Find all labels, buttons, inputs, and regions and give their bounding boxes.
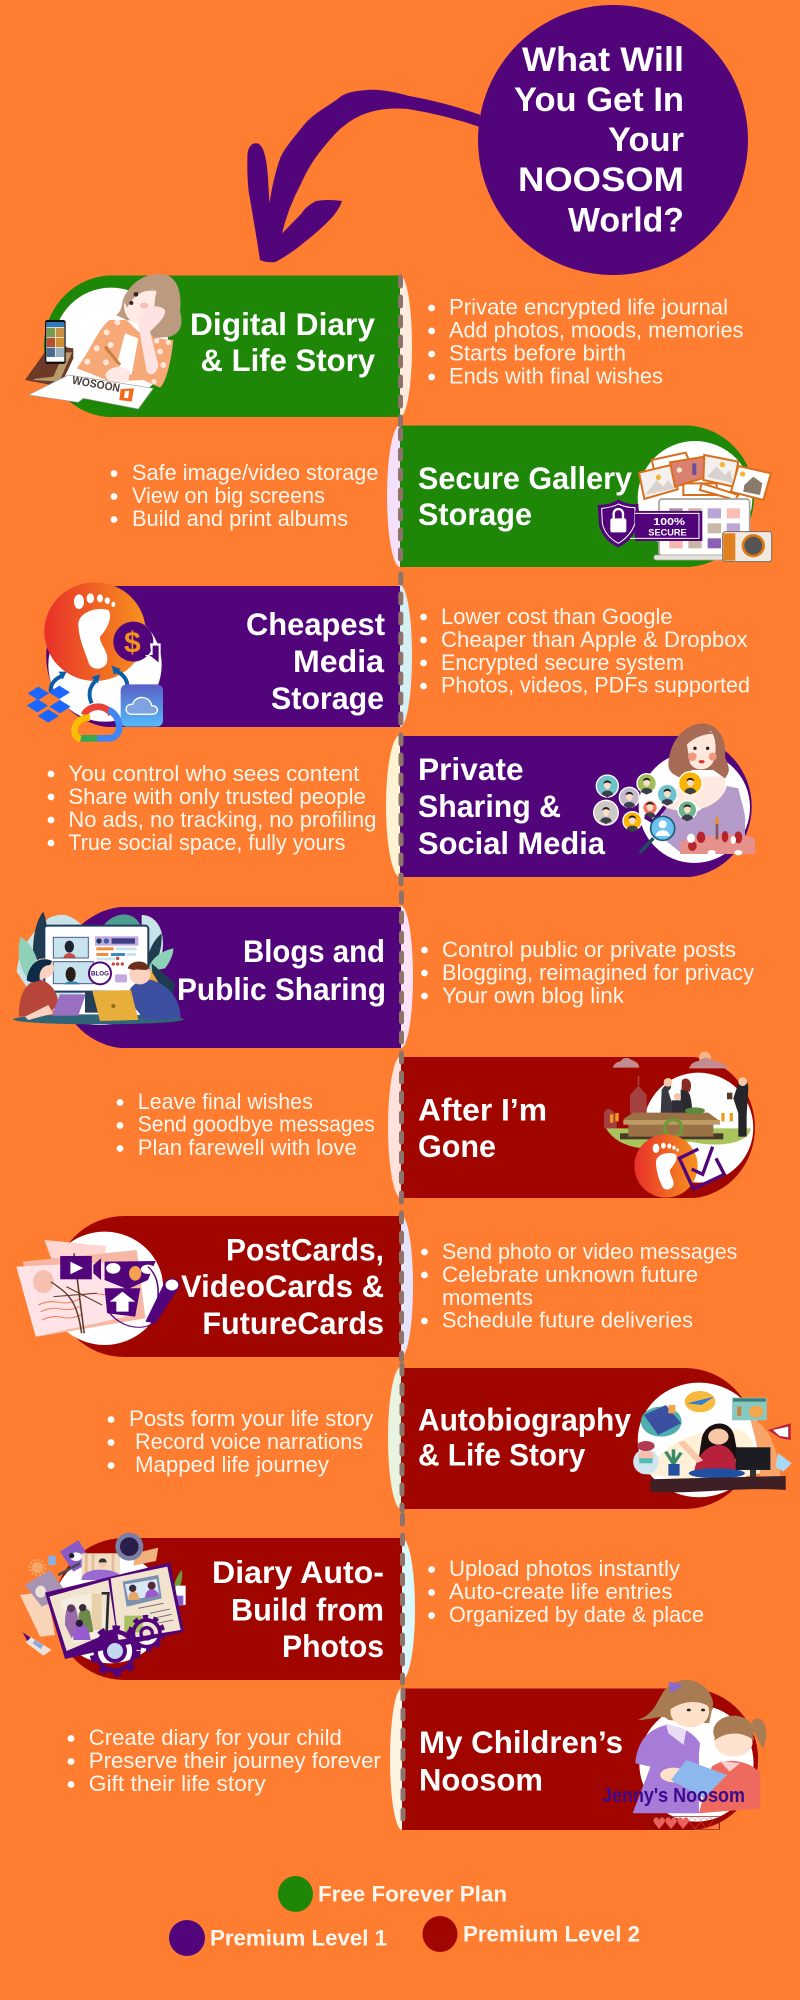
title: Social Media bbox=[418, 825, 605, 861]
panel: digital diary bbox=[25, 274, 400, 417]
illustration: mother and child reading bbox=[633, 1680, 766, 1829]
list: my children's noosom bbox=[68, 1725, 381, 1796]
panel: my children's noosom bbox=[402, 1680, 766, 1833]
title: Gone bbox=[418, 1128, 496, 1164]
illustration: woman with cake and avatars bbox=[594, 723, 755, 863]
card shape bbox=[402, 1688, 758, 1830]
panel: autobiography bbox=[401, 1368, 792, 1509]
panel: secure gallery bbox=[400, 426, 772, 567]
title: Private bbox=[418, 751, 524, 787]
title bbox=[181, 1232, 384, 1341]
arrow from badge to first card bbox=[247, 90, 480, 262]
title bbox=[246, 606, 385, 716]
title bbox=[177, 933, 386, 1007]
list: private sharing: You control who sees content bbox=[68, 761, 359, 786]
list: private sharing: Share with only trusted people bbox=[68, 784, 366, 809]
panel: postcards bbox=[16, 1216, 401, 1357]
title bbox=[418, 1402, 631, 1473]
list: autobiography: Posts form your life story bbox=[129, 1406, 373, 1431]
list: autobiography: Record voice narrations bbox=[135, 1429, 363, 1454]
list: diary auto-build: Organized by date & place bbox=[449, 1602, 704, 1627]
title: Media bbox=[293, 643, 384, 679]
list: cheapest media storage: Cheaper than Apple & Dropbox bbox=[441, 627, 748, 652]
title bbox=[418, 751, 605, 861]
list: cheapest media storage: Encrypted secure system bbox=[441, 650, 684, 675]
illustration: foot logo and cloud services bbox=[27, 582, 163, 739]
title badge bbox=[478, 5, 748, 275]
list: after I'm gone: Leave final wishes bbox=[138, 1089, 313, 1114]
list: diary auto-build: Upload photos instantly bbox=[449, 1556, 680, 1581]
title text: You Get In bbox=[514, 81, 684, 119]
list: private sharing: No ads, no tracking, no profiling bbox=[68, 807, 376, 832]
illustration: woman writing in a diary: WOSOON bbox=[71, 375, 121, 395]
title: PostCards, bbox=[226, 1232, 384, 1268]
list: cheapest media storage: Lower cost than Google bbox=[441, 604, 673, 629]
title: VideoCards & bbox=[181, 1268, 384, 1304]
title text: NOOSOM bbox=[518, 161, 684, 199]
title: Secure Gallery bbox=[418, 460, 632, 496]
title: My Children’s bbox=[419, 1724, 623, 1760]
list: digital diary: Starts before birth bbox=[449, 340, 626, 366]
illustration: postcards and icons bbox=[16, 1232, 179, 1345]
list: digital diary bbox=[428, 295, 743, 388]
list: digital diary: Add photos, moods, memories bbox=[449, 318, 743, 342]
list: cheapest media storage bbox=[420, 604, 750, 698]
list: postcards: Send photo or video messages bbox=[442, 1239, 737, 1264]
title text: Your bbox=[608, 121, 684, 159]
title text: World? bbox=[568, 202, 684, 240]
list: after I'm gone: Send goodbye messages bbox=[138, 1112, 375, 1137]
legend: premium level 2 bbox=[422, 1916, 640, 1952]
illustration: photo album and gears bbox=[20, 1533, 186, 1674]
list: diary auto-build: Auto-create life entries bbox=[449, 1579, 672, 1604]
card shape bbox=[401, 1368, 755, 1509]
illustration: farewell scene bbox=[604, 1052, 753, 1198]
title text: What Will bbox=[522, 41, 684, 79]
illustration: foot logo and cloud services: $ bbox=[124, 626, 141, 659]
card shape bbox=[54, 1216, 401, 1357]
title: FutureCards bbox=[202, 1305, 384, 1341]
illustration: two people blogging at a screen: BLOG bbox=[91, 971, 109, 978]
title text bbox=[514, 41, 684, 240]
legend: free forever plan: Free Forever Plan bbox=[318, 1882, 507, 1907]
title: Noosom bbox=[419, 1762, 543, 1798]
list: blogs and public sharing: Control public or private posts bbox=[442, 937, 736, 962]
list: digital diary: Private encrypted life journal bbox=[449, 295, 728, 320]
card shape bbox=[44, 276, 400, 417]
list: postcards bbox=[421, 1239, 737, 1333]
illustration: photos, laptop, shield and camera bbox=[598, 441, 772, 562]
list: secure gallery: Safe image/video storage bbox=[132, 460, 378, 485]
list: cheapest media storage: Photos, videos, PDFs supported bbox=[441, 673, 750, 698]
title: Sharing & bbox=[418, 788, 561, 824]
list: after I'm gone bbox=[117, 1089, 375, 1160]
list: autobiography bbox=[108, 1406, 373, 1477]
title: & Life Story bbox=[200, 342, 375, 378]
badge circle bbox=[478, 5, 748, 275]
card shape bbox=[401, 1057, 755, 1198]
list: postcards: Schedule future deliveries bbox=[442, 1308, 693, 1333]
title: Storage bbox=[418, 496, 532, 532]
title bbox=[190, 306, 375, 378]
panel: private sharing bbox=[400, 723, 755, 877]
illustration: photos, laptop, shield and camera: 100% bbox=[653, 517, 685, 528]
card shape bbox=[46, 586, 400, 727]
panel: cheapest media storage bbox=[27, 582, 400, 739]
title: Blogs and bbox=[243, 933, 385, 969]
title: Build from bbox=[231, 1592, 384, 1628]
panel: blogs and public sharing bbox=[13, 907, 401, 1048]
legend: premium level 1: Premium Level 1 bbox=[210, 1926, 387, 1951]
label: Jenny's Noosom: Jenny's Noosom bbox=[602, 1785, 745, 1807]
card shape bbox=[400, 426, 754, 567]
illustration: photos, laptop, shield and camera: SECURE bbox=[648, 527, 687, 537]
illustration: woman at a desk with life story icons bbox=[633, 1383, 792, 1497]
title bbox=[419, 1724, 623, 1798]
panel: diary auto-build bbox=[20, 1533, 402, 1680]
list: blogs and public sharing bbox=[421, 937, 754, 1008]
list: diary auto-build bbox=[428, 1556, 704, 1627]
dashed centre line bbox=[400, 277, 403, 1830]
legend bbox=[169, 1876, 640, 1956]
card shape bbox=[400, 736, 752, 877]
legend: premium level 2: Premium Level 2 bbox=[463, 1922, 640, 1947]
list: secure gallery: View on big screens bbox=[132, 483, 325, 508]
list: blogs and public sharing: Your own blog link bbox=[442, 983, 625, 1008]
title bbox=[418, 460, 632, 532]
title: Diary Auto- bbox=[212, 1554, 384, 1590]
title: After I’m bbox=[418, 1092, 547, 1128]
title bbox=[212, 1554, 384, 1664]
card shape bbox=[58, 907, 401, 1048]
list: secure gallery bbox=[111, 460, 378, 531]
illustration: two people blogging at a screen bbox=[13, 912, 184, 1025]
list: my children's noosom: Create diary for your child bbox=[89, 1725, 342, 1750]
list: blogs and public sharing: Blogging, reimagined for privacy bbox=[442, 960, 754, 985]
list: after I'm gone: Plan farewell with love bbox=[138, 1135, 357, 1160]
list: my children's noosom: Gift their life story bbox=[89, 1771, 266, 1796]
hearts: ♥♥♥♡♡ bbox=[652, 1814, 714, 1833]
panel: after I'm gone bbox=[401, 1052, 755, 1198]
illustration: woman writing in a diary bbox=[25, 274, 182, 409]
list: private sharing bbox=[48, 761, 376, 855]
legend: premium level 1 bbox=[169, 1920, 387, 1956]
list: private sharing: True social space, fully yours bbox=[68, 830, 345, 855]
list: digital diary: Ends with final wishes bbox=[449, 364, 663, 388]
card shape bbox=[54, 1538, 402, 1680]
title: Storage bbox=[271, 680, 384, 716]
title: Autobiography bbox=[418, 1402, 631, 1438]
title: Digital Diary bbox=[190, 306, 375, 342]
title: & Life Story bbox=[418, 1437, 586, 1473]
title: Cheapest bbox=[246, 606, 385, 642]
legend: free forever plan bbox=[278, 1876, 507, 1912]
list: secure gallery: Build and print albums bbox=[132, 506, 348, 531]
title: Photos bbox=[282, 1628, 384, 1664]
title bbox=[418, 1092, 547, 1164]
pale half ellipses behind the cards bbox=[386, 275, 415, 1830]
list: autobiography: Mapped life journey bbox=[135, 1452, 329, 1477]
title: Public Sharing bbox=[177, 971, 386, 1007]
list: postcards: Celebrate unknown future bbox=[442, 1262, 698, 1287]
list: my children's noosom: Preserve their journey forever bbox=[89, 1748, 381, 1773]
list: postcards: moments bbox=[442, 1285, 533, 1310]
